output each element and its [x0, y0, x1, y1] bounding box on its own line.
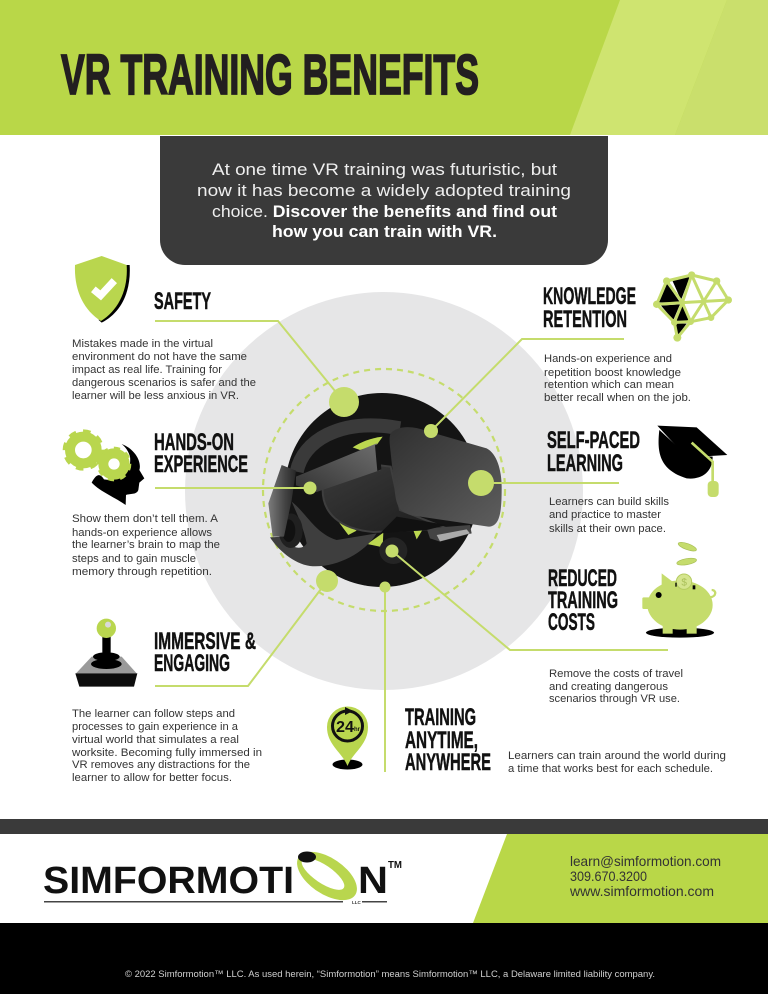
- heading: immersive and engaging: IMMERSIVE &: [154, 628, 256, 655]
- heading: self-paced learning: SELF-PACED: [547, 427, 640, 454]
- heading: hands-on experience: [154, 429, 248, 478]
- logo: [43, 842, 402, 910]
- text: hands-on: memory through repetition.: [72, 566, 212, 578]
- intro panel: now it has become a widely adopted training: [197, 182, 571, 200]
- icon: brain network: [653, 271, 732, 342]
- text: hands-on: the learner’s brain to map the: [72, 539, 220, 551]
- text: immersive: [71, 708, 262, 784]
- heading: immersive and engaging: [154, 628, 256, 677]
- text: safety: environment do not have the same: [72, 351, 247, 363]
- header band: [0, 0, 768, 135]
- footer green contact panel: www.simformotion.com: [569, 883, 714, 899]
- icon: piggy bank: [642, 541, 715, 638]
- icon: 24 hour pin: hr: [354, 727, 361, 733]
- heading: reduced training costs: TRAINING: [548, 587, 618, 614]
- text: immersive: learner to allow for better focus.: [72, 772, 232, 784]
- text: hands-on: [72, 513, 220, 578]
- text: hands-on: steps and to gain muscle: [72, 553, 196, 565]
- connector: immersive: [155, 570, 338, 686]
- text: self-paced: and practice to master: [549, 509, 661, 521]
- icon: piggy bank: $: [681, 577, 687, 588]
- heading: reduced training costs: [548, 565, 618, 636]
- text: training anytime: [508, 750, 726, 775]
- intro panel: [160, 136, 608, 265]
- intro panel: how you can train with VR.: [272, 223, 497, 241]
- heading: reduced training costs: COSTS: [548, 609, 595, 636]
- footer black band: [0, 923, 768, 994]
- heading: hands-on experience: EXPERIENCE: [154, 451, 248, 478]
- text: reduced costs: Remove the costs of travel: [549, 668, 683, 680]
- logo: SIMFORMOTI: [43, 860, 294, 902]
- text: knowledge: Hands-on experience and: [544, 353, 672, 365]
- connector: hands-on: [155, 482, 316, 494]
- text: hands-on: hands-on experience allows: [72, 527, 213, 539]
- text: safety: learner will be less anxious in VR.: [72, 390, 239, 402]
- text: self-paced: [549, 496, 670, 535]
- heading: training anytime anywhere: TRAINING: [405, 704, 476, 731]
- text: knowledge: repetition boost knowledge: [544, 367, 681, 379]
- heading: self-paced learning: [547, 427, 640, 477]
- heading: training anytime anywhere: ANYTIME,: [405, 727, 478, 754]
- dashed ring: [263, 369, 505, 611]
- footer green contact panel: learn@simformotion.com: [570, 853, 721, 869]
- text: knowledge: better recall when on the job.: [544, 392, 691, 404]
- heading: hands-on experience: HANDS-ON: [154, 429, 234, 456]
- text: safety: dangerous scenarios is safer and the: [72, 377, 256, 389]
- icon: 24 hour pin: 24: [336, 719, 354, 736]
- text: self-paced: skills at their own pace.: [549, 523, 666, 535]
- icon: 24 hour pin: [327, 706, 368, 770]
- title: VR TRAINING BENEFITS: [61, 43, 479, 107]
- icon: graduation cap: [657, 426, 727, 497]
- black disc: [285, 393, 479, 587]
- connector: safety: [155, 321, 359, 417]
- text: self-paced: Learners can build skills: [549, 496, 670, 508]
- connector: training anytime: [380, 582, 390, 772]
- text: immersive: virtual world that simulates a real: [72, 734, 239, 746]
- VR headset: [268, 425, 502, 566]
- heading: reduced training costs: REDUCED: [548, 565, 617, 592]
- heading: immersive and engaging: ENGAGING: [154, 650, 230, 677]
- heading: knowledge retention: RETENTION: [543, 306, 627, 333]
- heading: self-paced learning: LEARNING: [547, 450, 623, 477]
- icon: joystick: [75, 619, 137, 687]
- intro panel: At one time VR training was futuristic, but: [212, 161, 557, 179]
- footer green contact panel: 309.670.3200: [570, 868, 647, 884]
- text: hands-on: Show them don’t tell them. A: [72, 513, 219, 525]
- text: immersive: processes to gain experience in a: [72, 721, 238, 733]
- footer dark bar: [0, 819, 768, 834]
- heading: knowledge retention: KNOWLEDGE: [543, 283, 636, 310]
- icon: gears and head: [65, 432, 144, 505]
- text: reduced costs: and creating dangerous: [549, 681, 669, 693]
- logo: N: [358, 860, 388, 902]
- heading: knowledge retention: [543, 283, 636, 333]
- connector: reduced costs: [386, 544, 668, 650]
- text: reduced costs: scenarios through VR use.: [549, 693, 680, 705]
- text: reduced costs: [549, 668, 683, 705]
- text: safety: Mistakes made in the virtual: [72, 338, 213, 350]
- text: safety: [72, 338, 256, 402]
- logo: LLC: [352, 900, 361, 905]
- heading: training anytime anywhere: ANYWHERE: [405, 749, 491, 776]
- heading: safety: SAFETY: [154, 288, 211, 315]
- logo: TM: [388, 859, 402, 871]
- text: knowledge: [544, 353, 691, 404]
- text: immersive: worksite. Becoming fully immersed in: [71, 747, 262, 759]
- text: safety: impact as real life. Training for: [72, 364, 222, 376]
- text: training anytime: Learners can train around the world during: [508, 750, 726, 762]
- text: immersive: The learner can follow steps and: [72, 708, 235, 720]
- text: immersive: VR removes any distractions for the: [72, 759, 250, 771]
- footer green contact panel: [473, 834, 768, 923]
- heading: training anytime anywhere: [405, 704, 491, 776]
- text: training anytime: a time that works best for each schedule.: [508, 763, 713, 775]
- text: knowledge: retention which can mean: [544, 379, 674, 391]
- intro panel: choice. Discover the benefits and find out: [212, 203, 558, 221]
- connector: self-paced: [468, 470, 619, 496]
- connector: knowledge: [424, 339, 624, 438]
- central grey circle: [185, 292, 583, 690]
- icon: shield: [75, 256, 130, 323]
- copyright: © 2022 Simformotion™ LLC. As used herein, “Simformotion” means Simformotion™ LLC, a Delaware limited liability company.: [125, 969, 655, 980]
